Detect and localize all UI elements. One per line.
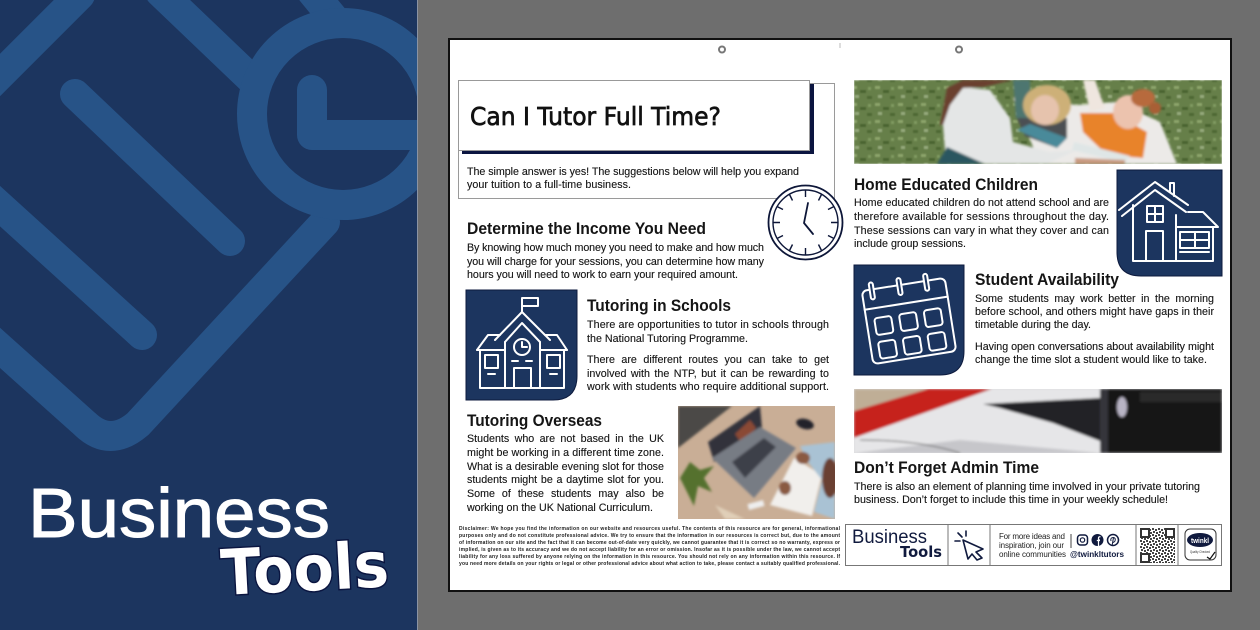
photo: child on video call with laptop [678, 406, 838, 519]
section: Tutoring Overseas: working on the UK National Curriculum. [466, 502, 653, 514]
QR code [1140, 528, 1175, 563]
section: Determine the Income You Need: hours you will need to work to earn your required amount. [467, 269, 738, 281]
icon: calendar [854, 265, 964, 375]
section: Determine the Income You Need: By knowing how much money you need to make and how much [467, 242, 764, 254]
binder holes [719, 43, 962, 52]
footer strip [846, 524, 1222, 566]
section: Don't Forget Admin Time: Don’t Forget Admin Time [854, 459, 1039, 477]
section: Student Availability: Student Availability [975, 271, 1119, 289]
section: Tutoring Overseas: Some of these students may also be [467, 488, 664, 500]
disclaimer: Disclaimer: We hope you find the information on our website and resources useful. The contents of this resource are for general, informational [459, 526, 841, 532]
disclaimer: implied, is given as to its accuracy and we do not accept liability for an error or omission. Insofar as it is possible under the law, we cannot accept [459, 547, 840, 553]
community text: online communities [999, 550, 1066, 559]
section: Student Availability: timetable during the day. [975, 319, 1091, 331]
twinkl logo: Quality Checked [1190, 550, 1210, 554]
heading: Can I Tutor Full Time?: Can I Tutor Full Time? [470, 102, 721, 131]
section: Tutoring in Schools: the National Tutoring Programme. [587, 333, 748, 345]
icon: house [1117, 170, 1222, 276]
section: Home Educated Children [854, 176, 1109, 250]
section: Home Educated Children: Home Educated Children [854, 176, 1038, 194]
panel: introduction box [458, 80, 834, 198]
panel: worksheet page [449, 39, 1231, 591]
icon: wall clock [768, 186, 842, 260]
section: Student Availability: change the time slot a student would like to take. [975, 354, 1207, 366]
social icons [1071, 534, 1118, 548]
title: Business: Business [28, 474, 330, 552]
title banner [458, 80, 814, 154]
disclaimer: you need more details on your rights or legal or other professional advice about what action to take, please contact a suitably qualified professional. [459, 561, 841, 567]
section: Home Educated Children: therefore available for sessions throughout the day. [854, 211, 1109, 223]
section: Tutoring in Schools: There are different routes you can take to get [587, 354, 829, 366]
footer logo: Business: Business [852, 527, 927, 548]
section: Tutoring in Schools: There are opportunities to tutor in schools through [587, 319, 829, 331]
intro text [467, 166, 799, 191]
section: Home Educated Children: These sessions can vary in what they cover and can [854, 225, 1109, 237]
intro text: The simple answer is yes! The suggestions below will help you expand [467, 166, 799, 178]
section: Determine the Income You Need: you will charge for your sessions, you can determine how many [467, 256, 765, 268]
intro text: your tuition to a full-time business. [467, 179, 631, 191]
section: Tutoring in Schools: work with students who require additional support. [586, 381, 829, 393]
section: Student Availability: Having open conversations about availability might [975, 341, 1214, 353]
section: Tutoring Overseas: Tutoring Overseas [467, 412, 602, 430]
section: Home Educated Children: Home educated children do not attend school and are [854, 197, 1109, 209]
twinkl logo: twinkl [1191, 538, 1209, 545]
community text [999, 532, 1066, 559]
section: Student Availability: before school, and others might have gaps in their [975, 306, 1214, 318]
section: Tutoring in Schools: involved with the NTP, but it can be rewarding to [587, 368, 829, 380]
icon: cursor click [955, 531, 983, 560]
title: Tools: Tools [219, 528, 391, 610]
disclaimer: of information on our site and the fact that it can become out-of-date very quickly, we cannot guarantee that it is correct so no warranty, express or [459, 540, 840, 546]
section: Student Availability: Some students may work better in the morning [975, 293, 1214, 305]
section: Tutoring Overseas: Students who are not based in the UK [467, 433, 665, 445]
section: Don't Forget Admin Time: There is also an element of planning time involved in your private tutoring [854, 481, 1200, 493]
section: Tutoring Overseas: students might be a daytime slot for you. [467, 474, 664, 486]
twinkl logo [1185, 529, 1216, 560]
section: Don't Forget Admin Time [854, 459, 1200, 506]
section: Tutoring Overseas [466, 412, 665, 514]
section: Determine the Income You Need [467, 220, 765, 281]
section: Don't Forget Admin Time: business. Don’t forget to include this time in your weekly schedule! [854, 494, 1168, 506]
section: Student Availability [975, 271, 1214, 366]
photo: fountain pen on paper [854, 389, 1222, 453]
icon: clipboard and clock watermark [0, 0, 434, 436]
icon: school [466, 290, 577, 400]
section: Tutoring Overseas: might be working in a different time zone. [467, 447, 664, 459]
panel: left navy cover [0, 0, 434, 630]
handle: @twinkltutors: @twinkltutors [1070, 550, 1125, 559]
section: Determine the Income You Need: Determine the Income You Need [467, 220, 706, 238]
section: Tutoring in Schools [586, 297, 829, 393]
disclaimer [459, 526, 841, 567]
footer logo: Tools: Tools [900, 543, 942, 561]
photo: family reading on the grass [854, 80, 1222, 164]
section: Tutoring in Schools: Tutoring in Schools [587, 297, 731, 315]
disclaimer: liability for any loss suffered by anyone relying on the information in this resource. You should not rely on any information within this resource. If [459, 554, 840, 560]
disclaimer: purposes only and do not constitute professional advice. We try to ensure that the information in our resources is correct but, due to the amount [459, 533, 840, 539]
community text: For more ideas and [999, 532, 1065, 541]
section: Tutoring Overseas: What is a desirable evening slot for those [467, 461, 664, 473]
community text: inspiration, join our [999, 541, 1064, 550]
section: Home Educated Children: include group sessions. [854, 238, 966, 250]
